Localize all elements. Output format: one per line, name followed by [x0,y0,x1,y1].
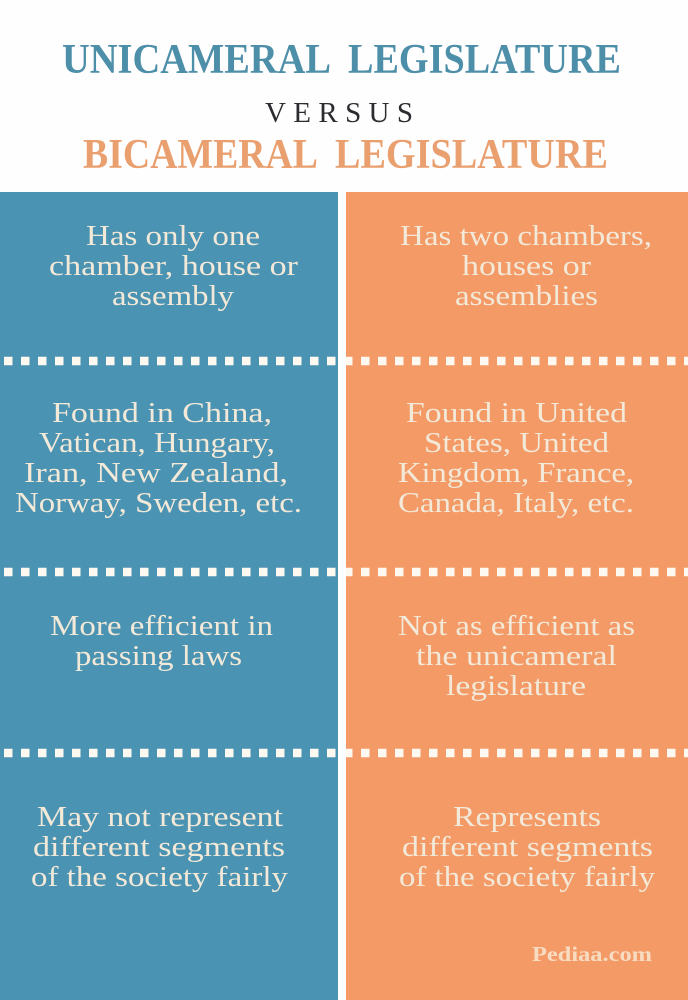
dotted divider row 1 [4,357,688,365]
text: chambers unicameral: chamber, house or [49,250,298,282]
text: efficiency unicameral: passing laws [75,640,242,672]
text: countries bicameral: Found in United [406,397,628,429]
text: representation unicameral: May not represent [37,801,283,833]
text: countries unicameral: Found in China, [52,397,272,429]
text: chambers bicameral: houses or [462,250,591,282]
text: representation unicameral: of the society fairly [31,861,289,893]
text: countries bicameral: Canada, Italy, etc. [398,487,634,519]
text: efficiency unicameral: More efficient in [50,610,274,642]
text: efficiency bicameral: Not as efficient as [398,610,635,642]
text: chambers bicameral: assemblies [455,280,598,312]
title: unicameral legislature: UNICAMERAL [62,37,331,83]
text: chambers unicameral [49,220,298,312]
panel: bicameral column [346,192,688,1000]
text: representation bicameral: different segments [402,831,653,863]
text: representation unicameral: different segments [33,831,285,863]
text: countries unicameral: Vatican, Hungary, [39,427,275,459]
title: versus: VERSUS [265,97,413,129]
title: unicameral legislature: LEGISLATURE [348,37,621,83]
text: representation unicameral [31,801,289,893]
text: countries unicameral [15,397,302,519]
text: chambers bicameral: Has two chambers, [400,220,652,252]
text: countries bicameral [398,397,634,519]
text: countries bicameral: States, United [424,427,610,459]
column gap [338,192,346,1000]
dotted divider row 2 [4,568,688,576]
title: unicameral legislature [62,37,621,83]
text: efficiency unicameral [50,610,274,672]
title: bicameral legislature: BICAMERAL [83,132,318,178]
text: chambers unicameral: Has only one [86,220,260,252]
text: efficiency bicameral [398,610,635,702]
text: chambers unicameral: assembly [112,280,235,312]
title: bicameral legislature: LEGISLATURE [335,132,608,178]
text: representation bicameral: Represents [453,801,601,833]
text: efficiency bicameral: the unicameral [416,640,617,672]
text: representation bicameral [399,801,656,893]
panel: unicameral column [0,192,338,1000]
title: bicameral legislature [83,132,608,178]
text: countries unicameral: Iran, New Zealand, [24,457,288,489]
text: countries unicameral: Norway, Sweden, etc. [15,487,302,519]
text: chambers bicameral [400,220,652,312]
dotted divider row 3 [4,749,688,757]
text: efficiency bicameral: legislature [446,670,586,702]
logo: Pediaa.com: Pediaa.com [532,942,653,966]
text: countries bicameral: Kingdom, France, [398,457,634,489]
text: representation bicameral: of the society fairly [399,861,656,893]
